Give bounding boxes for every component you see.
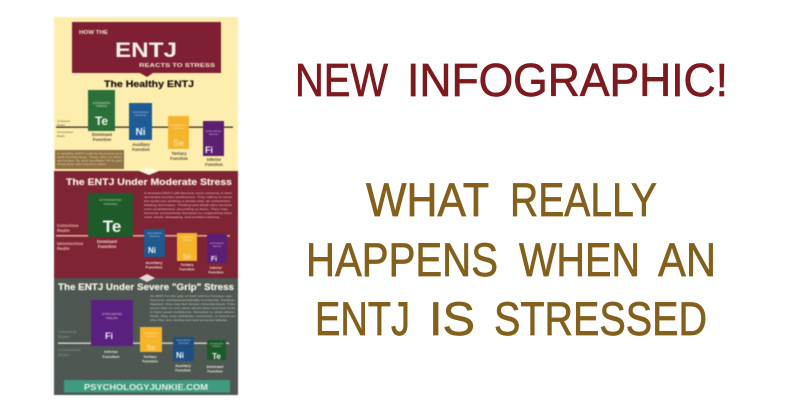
function card: Fi inferior: Fi	[205, 145, 213, 155]
function card: Se tertiary: EXTRAVERTED	[171, 124, 187, 127]
header banner: HOW THE	[79, 30, 108, 36]
text block: moderate stress description: dominant function preference. They will try to force	[144, 195, 233, 199]
realm divider line and labels: Realm	[57, 228, 70, 233]
function card: Se tertiary: Tertiary	[171, 151, 187, 156]
realm divider line and labels	[56, 223, 230, 251]
function card: Ni auxiliary: Ni	[136, 127, 146, 138]
function card: Fi inferior	[91, 300, 133, 359]
subheading line 3: STRESSED	[494, 292, 707, 345]
text block: moderate stress description: thinking dominates. Thinking and detail often become	[144, 203, 232, 207]
function card: Te dominant: THINKING	[96, 105, 107, 108]
function card: Ni auxiliary: INTROVERTED	[147, 233, 162, 235]
function card: Fi inferior: Function	[208, 270, 224, 274]
function card: Ni auxiliary: INTUITION	[150, 236, 160, 238]
headline: new infographic: INFOGRAPHIC!	[407, 54, 728, 106]
function card: Ni auxiliary: Auxiliary	[146, 260, 163, 265]
text block: moderate stress description: the world into working a certain way, as extraverted	[144, 199, 231, 203]
realm divider line and labels	[58, 329, 229, 357]
function card: Se tertiary: Se	[183, 254, 191, 261]
heading: moderate stress: The ENTJ Under Moderate Stress	[66, 177, 232, 187]
realm divider line and labels: Conscious	[57, 223, 79, 228]
function card: Fi inferior: INTROVERTED	[206, 131, 222, 133]
function card: Se tertiary: Function	[142, 360, 159, 364]
footer banner: website: PSYCHOLOGYJUNKIE.COM	[84, 382, 208, 392]
function card: Ni auxiliary: Ni	[148, 246, 156, 255]
realm divider line and labels: Realm	[57, 246, 70, 251]
text block: moderate stress description: outer world, delegating, and problem-solving.	[144, 215, 220, 219]
function card: Te dominant: Function	[207, 370, 224, 374]
function card: Ni auxiliary: INTROVERTED	[133, 112, 149, 114]
function card: Fi inferior: Function	[103, 354, 120, 359]
text block: moderate stress description: become excessively focused on organizing their	[144, 211, 232, 215]
function card: Te dominant: EXTRAVERTED	[93, 102, 110, 105]
function card: Ni auxiliary: INTROVERTED	[176, 340, 191, 342]
function card: Fi inferior	[207, 234, 227, 274]
function card: Fi inferior: Inferior	[210, 266, 223, 270]
heading: The Healthy ENTJ: The Healthy ENTJ	[104, 79, 194, 89]
function card: Se tertiary: Function	[179, 268, 195, 272]
function card: Se tertiary: SENSING	[182, 240, 192, 242]
function card: Ni auxiliary: Ni	[176, 351, 184, 360]
subheading line 1: WHAT	[366, 173, 489, 226]
function card: Fi inferior: FEELING	[213, 246, 222, 248]
realm divider line and labels: Realm	[58, 334, 70, 339]
function card: Te dominant	[88, 193, 133, 249]
function card: Ni auxiliary	[129, 103, 152, 152]
text block: grip stress description	[150, 294, 236, 322]
subheading line 2	[306, 233, 716, 286]
footer banner: website	[64, 380, 230, 392]
realm divider line and labels	[56, 119, 233, 138]
subheading line 1	[366, 173, 657, 226]
text block: grip stress description: who they are, feeling lost and personal attacks.	[150, 318, 228, 322]
text block: healthy description: well-functioning. They rely on their	[57, 155, 122, 159]
realm divider line and labels: Realm	[57, 134, 66, 138]
function card: Te dominant: Dominant	[92, 132, 113, 137]
text block: grip stress description: think, they may withdraw, overreact, or brood on	[150, 314, 236, 318]
subheading: what really happens	[306, 173, 716, 345]
realm divider line and labels: Realm	[57, 123, 66, 127]
function card: Se tertiary	[168, 116, 189, 161]
realm divider line and labels: Conscious	[57, 119, 71, 123]
function card: Te dominant: EXTRAVERTED	[100, 198, 122, 202]
function card: Te dominant: THINKING	[212, 346, 222, 348]
function card: Te dominant: THINKING	[103, 202, 118, 206]
function card: Se tertiary: Se	[173, 138, 184, 148]
headline: new infographic: NEW	[295, 54, 388, 106]
subheading line 3: ENTJ	[315, 292, 410, 345]
function card: Ni auxiliary: Auxiliary	[175, 364, 192, 368]
text block: grip stress description: in their usual confidence. Sensitive to what others	[150, 310, 235, 314]
panel: grip stress	[54, 274, 238, 395]
function card: Te dominant: EXTRAVERTED	[210, 342, 224, 346]
function card: Se tertiary	[177, 233, 197, 272]
function card: Fi inferior: Fi	[105, 331, 113, 341]
subheading line 3	[315, 292, 707, 345]
function card: Se tertiary: SENSING	[146, 336, 156, 338]
text block: grip stress description: hijacked, they may feel deeply misunderstood. They	[150, 302, 236, 306]
function card: Te dominant	[88, 90, 115, 142]
text block: grip stress description: become uncharacteristically emotional. Feeling	[150, 298, 235, 302]
text block: moderate stress description: over-emphasized, according to them. They may	[144, 207, 229, 211]
text block: moderate stress description	[144, 191, 233, 219]
function card: Ni auxiliary: Function	[175, 368, 192, 372]
function card: Te dominant: Function	[98, 244, 117, 249]
text block: moderate stress description: A stressed ENTJ will become more extreme in their	[144, 191, 232, 195]
text block: healthy description: dominant Te and auxiliary Ni to get	[57, 158, 122, 162]
function card: Te dominant: Dominant	[97, 239, 118, 244]
heading: grip stress: The ENTJ Under Severe "Grip" Stress	[58, 282, 234, 292]
function card: Ni auxiliary: Function	[132, 147, 150, 152]
panel: moderate stress	[54, 167, 238, 278]
realm divider line and labels: Unconscious	[58, 347, 81, 352]
function card: Se tertiary: EXTRAVERTED	[180, 236, 195, 239]
realm divider line and labels: Realm	[58, 352, 70, 357]
function card: Se tertiary: Function	[170, 156, 188, 161]
function card: Fi inferior: INTROVERTED	[210, 243, 225, 245]
text block: healthy description: things done with long-term vision.	[57, 162, 107, 166]
function card: Te dominant: Te	[212, 352, 221, 361]
realm divider line and labels: Conscious	[58, 329, 77, 334]
function card: Ni auxiliary: Function	[146, 264, 163, 270]
function card: Fi inferior: Inferior	[104, 349, 118, 354]
function card: Fi inferior: Function	[205, 162, 223, 167]
text block: grip stress description: worry that no one cares about them and lose trust	[150, 306, 235, 310]
header banner: ENTJ	[115, 39, 177, 62]
header banner: REACTS TO STRESS	[139, 63, 215, 69]
function card: Fi inferior	[203, 121, 224, 167]
function card: Te dominant: Dominant	[206, 365, 224, 369]
function card: Fi inferior: FEELING	[209, 134, 218, 136]
realm divider line and labels: Unconscious	[57, 130, 74, 134]
function card: Fi inferior: INTROVERTED	[102, 312, 122, 316]
function card: Ni auxiliary	[173, 337, 194, 372]
function card: Fi inferior: FEELING	[106, 316, 118, 320]
function card: Te dominant: Function	[93, 137, 112, 142]
function card: Te dominant: Te	[103, 217, 121, 236]
function card: Se tertiary: Se	[147, 345, 155, 352]
function card: Se tertiary: Tertiary	[181, 263, 193, 267]
subheading line 3: IS	[429, 292, 475, 345]
function card: Ni auxiliary: INTUITION	[178, 343, 189, 345]
realm divider line and labels: Unconscious	[57, 241, 84, 246]
subheading line 2: AN	[658, 233, 716, 286]
function card: Ni auxiliary: Auxiliary	[132, 142, 151, 147]
panel: healthy ENTJ	[54, 17, 238, 171]
subheading line 1: REALLY	[510, 173, 657, 226]
function card: Te dominant	[206, 340, 226, 374]
function card: Se tertiary	[140, 327, 162, 364]
function card: Te dominant: Te	[95, 114, 108, 128]
text block: grip stress description: An ENTJ in the grip of their inferior function can	[150, 294, 233, 298]
header banner	[72, 22, 221, 77]
subheading line 2: HAPPENS	[306, 233, 498, 286]
function card: Fi inferior: Inferior	[207, 157, 222, 162]
function card: Se tertiary: EXTRAVERTED	[144, 332, 159, 335]
subheading line 2: WHEN	[519, 233, 640, 286]
function card: Ni auxiliary	[144, 229, 165, 270]
infographic thumbnail	[54, 17, 238, 395]
text block: healthy description: A healthy ENTJ will be focused and	[57, 152, 123, 156]
function card: Ni auxiliary: INTUITION	[135, 115, 146, 117]
text block: healthy description	[55, 150, 124, 169]
function card: Fi inferior: Fi	[211, 256, 217, 263]
function card: Se tertiary: Tertiary	[143, 355, 158, 359]
function card: Se tertiary: SENSING	[174, 128, 184, 130]
